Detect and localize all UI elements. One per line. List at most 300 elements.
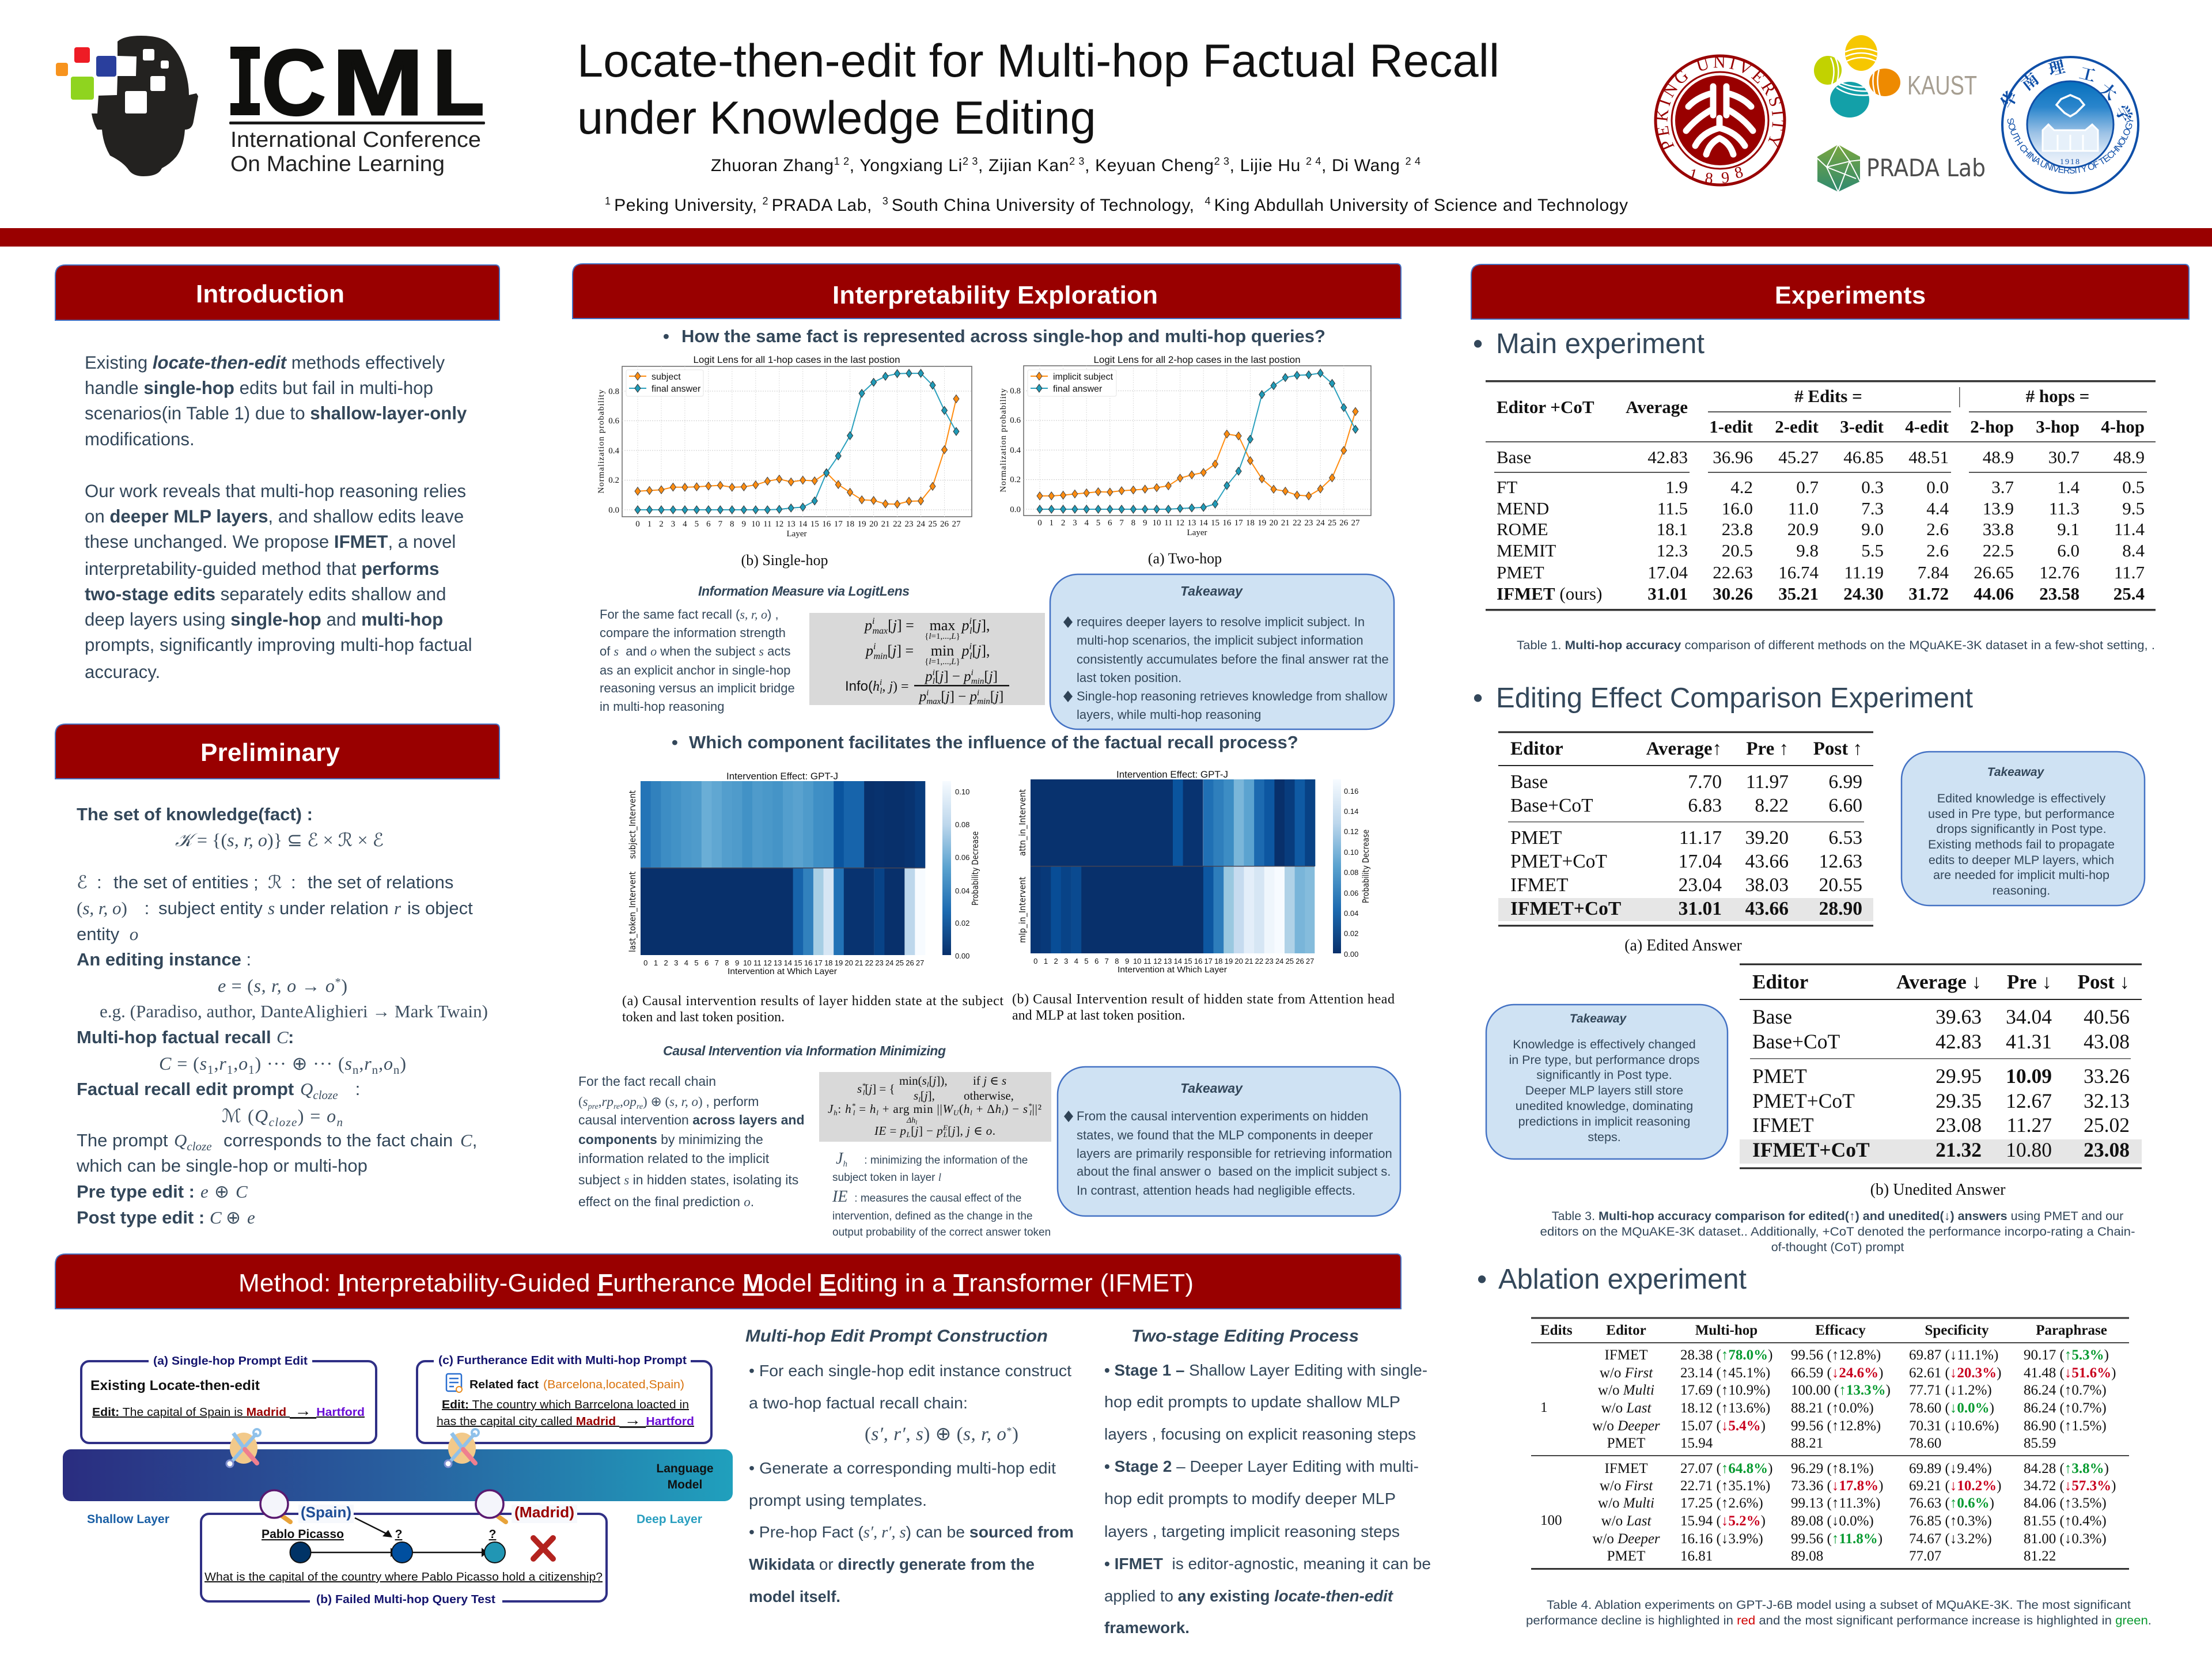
formula box: logitlens: i: [977, 688, 979, 698]
panel header: Introduction: Introduction: [196, 280, 344, 308]
formula box: causal intervention: =: [855, 1102, 869, 1116]
line chart: single-hop logit lens: 1: [647, 520, 652, 529]
table 4 columns: 99.56 (↑11.8%): [1791, 1531, 1883, 1547]
formula box: logitlens: p: [865, 642, 873, 659]
box: failed multi-hop query test: (Spain): [301, 1503, 351, 1521]
formula box: causal intervention: ||²: [1032, 1102, 1041, 1116]
callout: takeaway unedited: Knowledge is effectively changed: [1513, 1037, 1696, 1051]
box: multi-hop prompt edit: has the capital city called Madrid → Hartford: [437, 1411, 694, 1429]
table: unedited answer: PMET+CoT: [1752, 1089, 1855, 1112]
line chart: single-hop logit lens: 8: [730, 520, 734, 529]
callout: takeaway unedited: significantly in Post type.: [1536, 1068, 1672, 1082]
text block: multi-hop edit prompt construction: • Pre-hop Fact (s′, r′, s) can be sourced from: [749, 1523, 1074, 1541]
table 4 columns: 81.22: [2024, 1548, 2056, 1564]
line chart: single-hop logit lens: 5: [695, 520, 699, 529]
formula box: causal intervention: IE = p: [874, 1124, 906, 1138]
table: unedited answer: 41.31: [2006, 1030, 2052, 1053]
table 1: main experiment: 2-edit: [1775, 416, 1819, 437]
heatmap: attention and MLP intervention: 0.08: [1344, 868, 1358, 877]
panel header: Preliminary: Preliminary: [200, 738, 340, 767]
formula box: logitlens: [j] −: [935, 669, 960, 684]
table 4 columns: 74.67 (↓3.2%): [1909, 1531, 1992, 1547]
table 4 columns: 17.69 (↑10.9%): [1680, 1382, 1770, 1398]
text block: introduction: two-stage edits separately edits shallow and: [85, 584, 446, 604]
band: language model: Language: [656, 1462, 714, 1475]
table 1: main experiment: 17.04: [1647, 562, 1688, 582]
text block: causal intervention: For the fact recall chain: [578, 1074, 716, 1089]
line chart: two-hop logit lens: Normalization probability: [999, 388, 1008, 493]
formula box: logitlens: p: [963, 669, 971, 684]
table: unedited answer: 12.67: [2006, 1089, 2052, 1112]
table 4 columns: 62.61 (↓20.3%): [1909, 1365, 2001, 1381]
formula box: causal intervention: [j] = {: [865, 1082, 895, 1096]
text block: causal intervention: ,: [620, 1094, 623, 1109]
table 1: main experiment: 2.6: [1926, 540, 1949, 560]
line chart: single-hop logit lens: 21: [881, 520, 890, 529]
table 1: main experiment: 33.8: [1983, 519, 2014, 539]
table 4 columns: 96.29 (↑8.1%): [1791, 1461, 1874, 1476]
formula box: logitlens: min: [971, 677, 984, 686]
text block: causal intervention: rp: [602, 1094, 613, 1109]
line chart: two-hop logit lens: 0: [1037, 518, 1042, 528]
table 1: main experiment: 11.5: [1657, 498, 1688, 518]
line chart: two-hop logit lens: 13: [1187, 518, 1196, 528]
authors: , Zijian Kan: [978, 156, 1069, 175]
text block: two-stage editing process: hop edit prompts to update shallow MLP: [1104, 1393, 1400, 1411]
heatmap: layer hidden state intervention: 22: [865, 959, 873, 967]
table 1: main experiment: MEND: [1497, 498, 1549, 518]
table: edited answer: 43.66: [1745, 898, 1789, 919]
table: unedited answer: Average ↓: [1896, 971, 1982, 993]
line chart: single-hop logit lens: 13: [787, 520, 796, 529]
text block: preliminary definitions: o: [238, 1053, 248, 1074]
callout: takeaway unedited: predictions in implicit reasoning: [1518, 1115, 1690, 1128]
table 4: ablation experiments: w/o Last: [1601, 1400, 1652, 1416]
formula box: logitlens: max: [872, 626, 888, 636]
title: Locate-then-edit for Multi-hop Factual Recall: [577, 35, 1499, 87]
heading: editing effect comparison: Editing Effect Comparison Experiment: [1496, 683, 1973, 714]
affiliations: 3: [882, 195, 891, 207]
title: [577, 35, 1499, 144]
table: edited answer: 20.55: [1819, 874, 1862, 896]
table 1: main experiment: 3-hop: [2036, 416, 2080, 437]
formula box: logitlens: max: [930, 617, 955, 634]
caption: single-hop: (b) Single-hop: [741, 552, 828, 569]
formula box: causal intervention: Δh: [907, 1116, 915, 1125]
icon: wrench right: [445, 1429, 479, 1467]
formula box: logitlens: [809, 613, 1045, 706]
formula box: logitlens: i: [872, 616, 874, 626]
table: edited answer: PMET+CoT: [1510, 851, 1607, 872]
line chart: two-hop logit lens: 25: [1328, 518, 1336, 528]
line chart: single-hop logit lens: 0.6: [608, 416, 620, 426]
heatmap: attention and MLP intervention: 5: [1084, 957, 1089, 965]
text block: multi-hop edit prompt construction: Wikidata or directly generate from the: [749, 1555, 1035, 1573]
table: edited answer: 6.53: [1828, 827, 1862, 849]
panel header: Interpretability Exploration: Interpretability Exploration: [832, 281, 1158, 309]
line chart: single-hop logit lens: 6: [706, 520, 711, 529]
table: unedited answer: IFMET+CoT: [1752, 1138, 1870, 1161]
box: single-hop prompt edit: Edit: The capital of Spain is Madrid → Hartford: [92, 1402, 365, 1419]
text block: preliminary definitions: C: [236, 1181, 248, 1202]
text block: preliminary definitions: (s, r, o): [77, 898, 127, 918]
heatmap: attention and MLP intervention: 19: [1225, 957, 1233, 965]
heading: question 2: Which component facilitates the influence of the factual recall process?: [689, 732, 1298, 752]
text block: preliminary definitions: ,: [359, 1053, 363, 1074]
caption: table 3: editors on the MQuAKE-3K dataset.. Additionally, +CoT denoted the performance incorpo-rating a Chain-: [1540, 1225, 2135, 1238]
caption: table 3: Table 3. Multi-hop accuracy comparison for edited(↑) and unedited(↓) answers using PMET and our: [1552, 1209, 2123, 1223]
text block: multi-hop edit prompt construction: ): [1012, 1424, 1018, 1445]
table 1: main experiment: 46.85: [1843, 447, 1884, 467]
logo: PRADA Lab: PRADA Lab: [1866, 154, 1986, 182]
formula box: causal intervention: otherwise,: [964, 1089, 1014, 1103]
heading bullet: editing effect comparison: •: [1473, 683, 1483, 714]
affiliations: 1: [605, 195, 614, 207]
table: edited answer: 39.20: [1745, 827, 1789, 849]
formula box: logitlens: p: [918, 689, 926, 704]
text block: causal intervention: ,: [599, 1094, 602, 1109]
table 1: main experiment: 13.9: [1983, 498, 2014, 518]
table 4 columns: 89.08: [1791, 1548, 1823, 1564]
heatmap: attention and MLP intervention: 22: [1255, 957, 1263, 965]
heatmap: layer hidden state intervention: 0.10: [955, 787, 969, 796]
heatmap: layer hidden state intervention: 0.02: [955, 919, 969, 927]
line chart: two-hop logit lens: 24: [1316, 518, 1325, 528]
table 4: ablation experiments: IFMET: [1605, 1461, 1647, 1476]
line chart: single-hop logit lens: 0.2: [608, 476, 619, 485]
table 4: ablation experiments: PMET: [1607, 1548, 1645, 1564]
formula box: causal intervention: h: [834, 1108, 838, 1117]
heatmap: attention and MLP intervention: 16: [1194, 957, 1202, 965]
formula box: causal intervention: *: [851, 1101, 855, 1110]
logo: South China University of Technology: 华南理工大学: [1994, 54, 2138, 126]
line chart: two-hop logit lens: 11: [1164, 518, 1173, 528]
formula box: logitlens: [j] =: [887, 642, 914, 659]
box: failed multi-hop query test: ?: [489, 1528, 496, 1541]
table: unedited answer: Editor: [1752, 971, 1808, 993]
text block: preliminary definitions: [76, 804, 488, 1228]
heading: causal intervention: Causal Intervention via Information Minimizing: [663, 1043, 946, 1058]
text block: preliminary definitions: n: [336, 1115, 343, 1129]
heatmap: layer hidden state intervention: 15: [794, 959, 802, 967]
caption: table 4: [1526, 1598, 2152, 1627]
text block: preliminary definitions: The set of knowledge(fact) :: [77, 804, 313, 824]
icon: wrench left: [226, 1429, 260, 1467]
table 4 columns: 86.24 (↑0.7%): [2024, 1382, 2107, 1398]
text block: two-stage editing process: applied to any existing locate-then-edit: [1104, 1587, 1394, 1605]
table: edited answer: Average↑: [1646, 738, 1722, 759]
text block: preliminary definitions: 1: [227, 1063, 233, 1077]
heatmap: attention and MLP intervention: 20: [1234, 957, 1243, 965]
text block: multi-hop edit prompt construction: (s′, r′, s) ⊕ (s, r, o: [865, 1424, 1006, 1445]
table 4 columns: 15.94 (↓5.2%): [1680, 1513, 1766, 1529]
line chart: single-hop logit lens: 19: [858, 520, 866, 529]
heatmap: attention and MLP intervention: Intervention Effect: GPT-J: [1116, 769, 1228, 780]
table: unedited answer: IFMET: [1752, 1113, 1814, 1137]
formula box: causal intervention: [819, 1072, 1051, 1142]
text block: preliminary definitions: under relation: [279, 898, 389, 918]
authors: Zhuoran Zhang: [711, 156, 834, 175]
table: unedited answer: 10.09: [2006, 1065, 2052, 1088]
line chart: two-hop logit lens: 0.6: [1010, 416, 1021, 425]
formula box: causal intervention: [j]),: [929, 1074, 948, 1088]
table: edited answer: 17.04: [1679, 851, 1722, 872]
formula box: causal intervention: if j ∈ s: [973, 1074, 1006, 1088]
table 1: main experiment: 11.0: [1788, 498, 1819, 518]
text block: preliminary definitions: e: [200, 1181, 209, 1202]
line chart: two-hop logit lens: implicit subject: [1053, 372, 1113, 382]
table 1: main experiment: 7.84: [1918, 562, 1949, 582]
heatmap: attention and MLP intervention: 0.06: [1344, 889, 1358, 897]
formula box: logitlens: [j] =: [888, 617, 914, 634]
caption: table 4: performance decline is highlighted in red and the most significant performance increase is highlighted in green.: [1526, 1613, 2152, 1627]
table 1: main experiment: 6.0: [2057, 540, 2080, 560]
logo: ICML: L: [433, 31, 484, 135]
affiliations: 2: [762, 195, 771, 207]
table 4: ablation experiments: PMET: [1607, 1435, 1645, 1451]
heatmap: attention and MLP intervention: 10: [1133, 957, 1141, 965]
heatmap: layer hidden state intervention: 0.06: [955, 853, 969, 862]
heatmap: layer hidden state intervention: 16: [804, 959, 812, 967]
title: under Knowledge Editing: [577, 92, 1096, 144]
table 1: main experiment: ROME: [1497, 519, 1548, 539]
formula box: logitlens: max: [926, 697, 941, 706]
formula box: logitlens: [j] −: [941, 689, 966, 704]
table 1: main experiment: 30.7: [2048, 447, 2080, 467]
text block: preliminary definitions: ℳ (Q: [222, 1105, 268, 1126]
text block: introduction: on deeper MLP layers, and shallow edits leave: [85, 506, 464, 527]
text block: preliminary definitions: ⊕: [214, 1181, 229, 1202]
affiliations: Peking University,: [614, 196, 762, 215]
heatmap: layer hidden state intervention: [627, 771, 980, 976]
table: unedited answer: 29.35: [1936, 1089, 1982, 1112]
text block: formula explanations: output probability of the correct answer token: [832, 1226, 1051, 1238]
table: edited answer: 28.90: [1819, 898, 1862, 919]
table 4 columns: 86.24 (↑0.7%): [2024, 1400, 2107, 1416]
label: shallow layer: Shallow Layer: [87, 1513, 169, 1526]
panel header: Method: [55, 1254, 1401, 1309]
formula box: causal intervention: l: [915, 1120, 917, 1126]
table 1: main experiment: 31.01: [1647, 584, 1688, 604]
table: unedited answer: Pre ↓: [2007, 971, 2052, 993]
heatmap: attention and MLP intervention: 0.04: [1344, 909, 1358, 918]
text block: causal intervention: (s: [578, 1094, 588, 1109]
table 1: main experiment: 2-hop: [1970, 416, 2014, 437]
text block: preliminary definitions: ⊕: [226, 1207, 241, 1228]
text block: preliminary definitions: Pre type edit :: [77, 1181, 195, 1202]
table 4 columns: [1680, 1347, 2116, 1564]
box: single-hop prompt edit: Existing Locate-then-edit: [90, 1378, 260, 1393]
heading: main experiment: Main experiment: [1496, 328, 1705, 359]
formula box: logitlens: p: [969, 689, 977, 704]
heatmap: layer hidden state intervention: Probability Decrease: [970, 831, 980, 906]
table 1: main experiment: 9.8: [1796, 540, 1819, 560]
text block: logitlens explanation: [600, 607, 795, 714]
text block: preliminary definitions: 1: [248, 1063, 255, 1077]
line chart: two-hop logit lens: 10: [1152, 518, 1161, 528]
callout: takeaway 1: multi-hop scenarios, the implicit subject information: [1077, 633, 1363, 647]
formula box: logitlens: i: [971, 668, 974, 677]
text block: two-stage editing process: layers , targeting implicit reasoning steps: [1104, 1522, 1400, 1540]
text block: preliminary definitions: r: [364, 1053, 372, 1074]
caption: heatmap a: (a) Causal intervention results of layer hidden state at the subject: [622, 994, 1003, 1009]
table 4 columns: 76.63 (↑0.6%): [1909, 1495, 1994, 1511]
text block: preliminary definitions: o: [384, 1053, 393, 1074]
table 1: main experiment: PMET: [1497, 562, 1544, 582]
heatmap: attention and MLP intervention: 4: [1074, 957, 1078, 965]
formula box: logitlens: i: [873, 642, 876, 652]
formula box: causal intervention: l: [918, 1095, 921, 1104]
table 1: main experiment: 9.1: [2057, 519, 2080, 539]
text block: preliminary definitions: :: [288, 1027, 294, 1047]
heatmap: layer hidden state intervention: 3: [674, 959, 678, 967]
line chart: two-hop logit lens: 1: [1050, 518, 1054, 528]
formula box: causal intervention: [j],: [921, 1089, 935, 1103]
table 4 columns: 73.36 (↓17.8%): [1791, 1478, 1883, 1494]
text block: formula explanations: J: [836, 1150, 844, 1168]
table 4 columns: 69.21 (↓10.2%): [1909, 1478, 2001, 1494]
formula box: logitlens: [j]: [984, 669, 998, 684]
text block: two-stage editing process: • Stage 1 – Shallow Layer Editing with single-: [1104, 1361, 1427, 1379]
caption: table 3: of-thought (CoT) prompt: [1771, 1240, 1904, 1254]
table 1: main experiment: 31.72: [1908, 584, 1949, 604]
callout: takeaway edited: edits to deeper MLP layers, which: [1929, 853, 2114, 867]
heading: question 1: •: [663, 326, 669, 346]
text block: preliminary definitions: 1: [207, 1063, 214, 1077]
caption: heatmap a: [622, 994, 1003, 1025]
line chart: single-hop logit lens: 16: [822, 520, 831, 529]
table 4 columns: 69.89 (↓9.4%): [1909, 1461, 1992, 1476]
box: single-hop prompt edit: [81, 1354, 376, 1443]
heatmap: attention and MLP intervention: 12: [1153, 957, 1162, 965]
formula box: causal intervention: (: [959, 1102, 963, 1116]
table 4: ablation experiments: w/o Deeper: [1592, 1531, 1660, 1547]
callout: takeaway 2: layers are primarily responsible for retrieving information: [1077, 1146, 1392, 1161]
text block: introduction: [85, 353, 472, 682]
line chart: two-hop logit lens: 7: [1119, 518, 1124, 528]
text block: formula explanations: h: [843, 1160, 847, 1169]
table 1: main experiment: Editor +CoT: [1497, 397, 1594, 417]
heatmap: attention and MLP intervention: 23: [1265, 957, 1274, 965]
logo: ICML: M: [332, 31, 424, 135]
heatmap: layer hidden state intervention: 26: [906, 959, 914, 967]
line chart: single-hop logit lens: 0.4: [608, 446, 620, 456]
heatmap: layer hidden state intervention: 6: [704, 959, 709, 967]
table 4 columns: 22.71 (↑35.1%): [1680, 1478, 1770, 1494]
text block: two-stage editing process: Two-stage Editing Process: [1131, 1327, 1359, 1346]
table: edited answer: 12.63: [1819, 851, 1862, 872]
text block: introduction: Existing locate-then-edit methods effectively: [85, 353, 445, 373]
text block: preliminary definitions: :: [350, 1079, 360, 1099]
formula box: causal intervention: s: [857, 1082, 862, 1096]
table 4 columns: 18.12 (↑13.6%): [1680, 1400, 1770, 1416]
table 1: main experiment: 22.63: [1713, 562, 1753, 582]
formula box: causal intervention: + arg min ||: [879, 1102, 942, 1116]
line chart: two-hop logit lens: 21: [1281, 518, 1290, 528]
text block: causal intervention: pre: [588, 1103, 599, 1111]
callout: takeaway 1: [1050, 574, 1394, 729]
line chart: two-hop logit lens: 5: [1096, 518, 1100, 528]
formula box: causal intervention: L: [906, 1130, 911, 1139]
text block: introduction: prompts, significantly improving multi-hop factual: [85, 635, 472, 655]
table 1: main experiment: 1.4: [2057, 477, 2080, 497]
formula box: logitlens: p: [958, 617, 969, 634]
text block: introduction: modifications.: [85, 429, 195, 449]
table 1: main experiment: 3.7: [1991, 477, 2014, 497]
formula box: logitlens: l: [933, 677, 935, 686]
heatmap: layer hidden state intervention: 14: [784, 959, 792, 967]
text block: preliminary definitions: :: [97, 872, 102, 892]
line chart: single-hop logit lens: 18: [846, 520, 854, 529]
header red bar: [0, 228, 2212, 247]
heatmap: layer hidden state intervention: 24: [885, 959, 893, 967]
table 1: main experiment: 11.3: [2049, 498, 2080, 518]
text block: preliminary definitions: o: [125, 924, 138, 944]
heatmap: attention and MLP intervention: 21: [1245, 957, 1253, 965]
table: unedited answer: PMET: [1752, 1065, 1807, 1088]
band: language model: Model: [668, 1478, 702, 1491]
panel header: Preliminary: [55, 724, 499, 779]
table 1: main experiment: [1486, 380, 2156, 611]
table 1: main experiment: 7.3: [1861, 498, 1884, 518]
callout: takeaway edited: Edited knowledge is effectively: [1937, 791, 2105, 805]
table 1: main experiment: # hops =: [2026, 386, 2089, 406]
heatmap: attention and MLP intervention: [1017, 769, 1371, 975]
heatmap: attention and MLP intervention: 27: [1306, 957, 1314, 965]
table 1: main experiment: 48.51: [1908, 447, 1949, 467]
table 4: ablation experiments: w/o Deeper: [1592, 1418, 1660, 1434]
caption: table 3: [1540, 1209, 2135, 1254]
formula box: causal intervention: J: [828, 1102, 834, 1116]
formula box: logitlens: p: [924, 669, 933, 684]
line chart: single-hop logit lens: Logit Lens for all 1-hop cases in the last postion: [693, 354, 900, 365]
text block: preliminary definitions: s: [345, 1053, 352, 1074]
callout: takeaway 1: requires deeper layers to resolve implicit subject. In: [1077, 615, 1365, 629]
text block: multi-hop edit prompt construction: prompt using templates.: [749, 1491, 927, 1509]
formula box: causal intervention: l: [853, 1108, 855, 1117]
text block: preliminary definitions: ): [341, 975, 347, 996]
text block: introduction: accuracy.: [85, 662, 160, 682]
table 4: ablation experiments: Paraphrase: [2036, 1323, 2107, 1338]
text block: preliminary definitions: Q: [174, 1130, 187, 1150]
table 1: main experiment: 11.7: [2114, 562, 2145, 582]
line chart: single-hop logit lens: 10: [751, 520, 760, 529]
table 4 columns: 23.14 (↑45.1%): [1680, 1365, 1770, 1381]
line chart: single-hop logit lens: 2: [659, 520, 664, 529]
heading bullet: ablation experiment: •: [1477, 1264, 1487, 1295]
authors: 2 3: [1214, 156, 1229, 167]
text block: preliminary definitions: the set of relations: [308, 872, 453, 892]
heatmap: layer hidden state intervention: 19: [835, 959, 843, 967]
callout: takeaway unedited: [1486, 1005, 1728, 1159]
text block: preliminary definitions: C = (s: [159, 1053, 207, 1074]
authors: 2 4: [1406, 156, 1421, 167]
table: edited answer: 6.83: [1688, 795, 1722, 816]
text block: multi-hop edit prompt construction: a two-hop factual recall chain:: [749, 1394, 968, 1412]
label: deep layer: Deep Layer: [637, 1513, 702, 1526]
line chart: single-hop logit lens: 0.0: [608, 506, 619, 515]
table 4 columns: 78.60: [1909, 1435, 1941, 1451]
table 1: main experiment: 1-edit: [1709, 416, 1753, 437]
text block: causal intervention: causal intervention across layers and: [578, 1112, 805, 1127]
line chart: single-hop logit lens: [597, 354, 972, 539]
callout: takeaway 2: Takeaway: [1180, 1081, 1243, 1096]
heatmap: layer hidden state intervention: 12: [763, 959, 772, 967]
table: unedited answer: 10.80: [2006, 1138, 2052, 1161]
table 1: main experiment: 26.65: [1974, 562, 2014, 582]
diagram: IFMET method: [63, 1353, 733, 1608]
formula box: logitlens: , j) =: [882, 679, 909, 694]
